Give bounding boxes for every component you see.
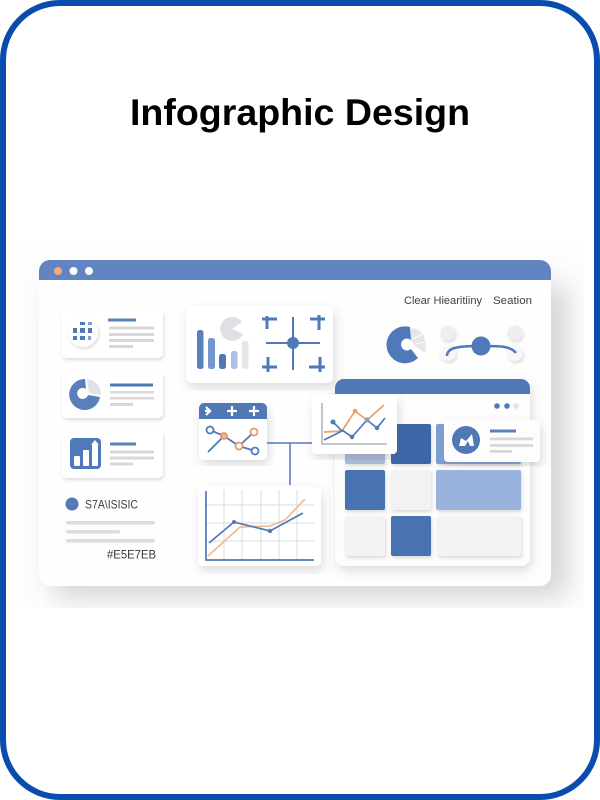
table cells	[345, 424, 521, 556]
status dots	[494, 403, 519, 409]
dashboard window	[39, 260, 551, 586]
section heading: Clear Hiearitiiny	[404, 295, 482, 307]
table panel	[335, 379, 530, 566]
statistic dot	[66, 498, 78, 510]
card: small floating info	[444, 420, 540, 462]
statistic text lines	[66, 521, 155, 542]
window header bar	[39, 260, 551, 280]
card: large line chart	[198, 487, 321, 566]
header icons	[205, 406, 259, 416]
section label: Seation	[493, 295, 532, 307]
card: grid icon	[62, 310, 163, 358]
window control dots	[54, 267, 93, 275]
statistic label: S7A\ISISIC	[85, 498, 138, 512]
card: donut icon	[62, 372, 163, 418]
card: bars and crosshair	[186, 306, 333, 383]
node card header	[199, 403, 267, 419]
card: node graph	[199, 403, 267, 460]
chart grid	[205, 490, 314, 560]
card: growth bars icon	[62, 431, 163, 478]
blue series	[209, 513, 303, 543]
card: floating line chart	[312, 395, 397, 454]
node graph	[206, 426, 258, 454]
statistic block	[66, 498, 156, 562]
connector diagram	[440, 326, 523, 361]
colour code label: #E5E7EB	[107, 548, 156, 562]
image background	[41, 273, 580, 608]
donut chart	[387, 326, 426, 363]
crosshair diagram	[262, 315, 325, 372]
chart axes	[206, 491, 314, 560]
bar chart	[197, 317, 248, 369]
title: Infographic Design	[130, 92, 470, 133]
table header	[335, 379, 530, 394]
orange series	[208, 499, 305, 556]
connector lines	[267, 443, 312, 485]
